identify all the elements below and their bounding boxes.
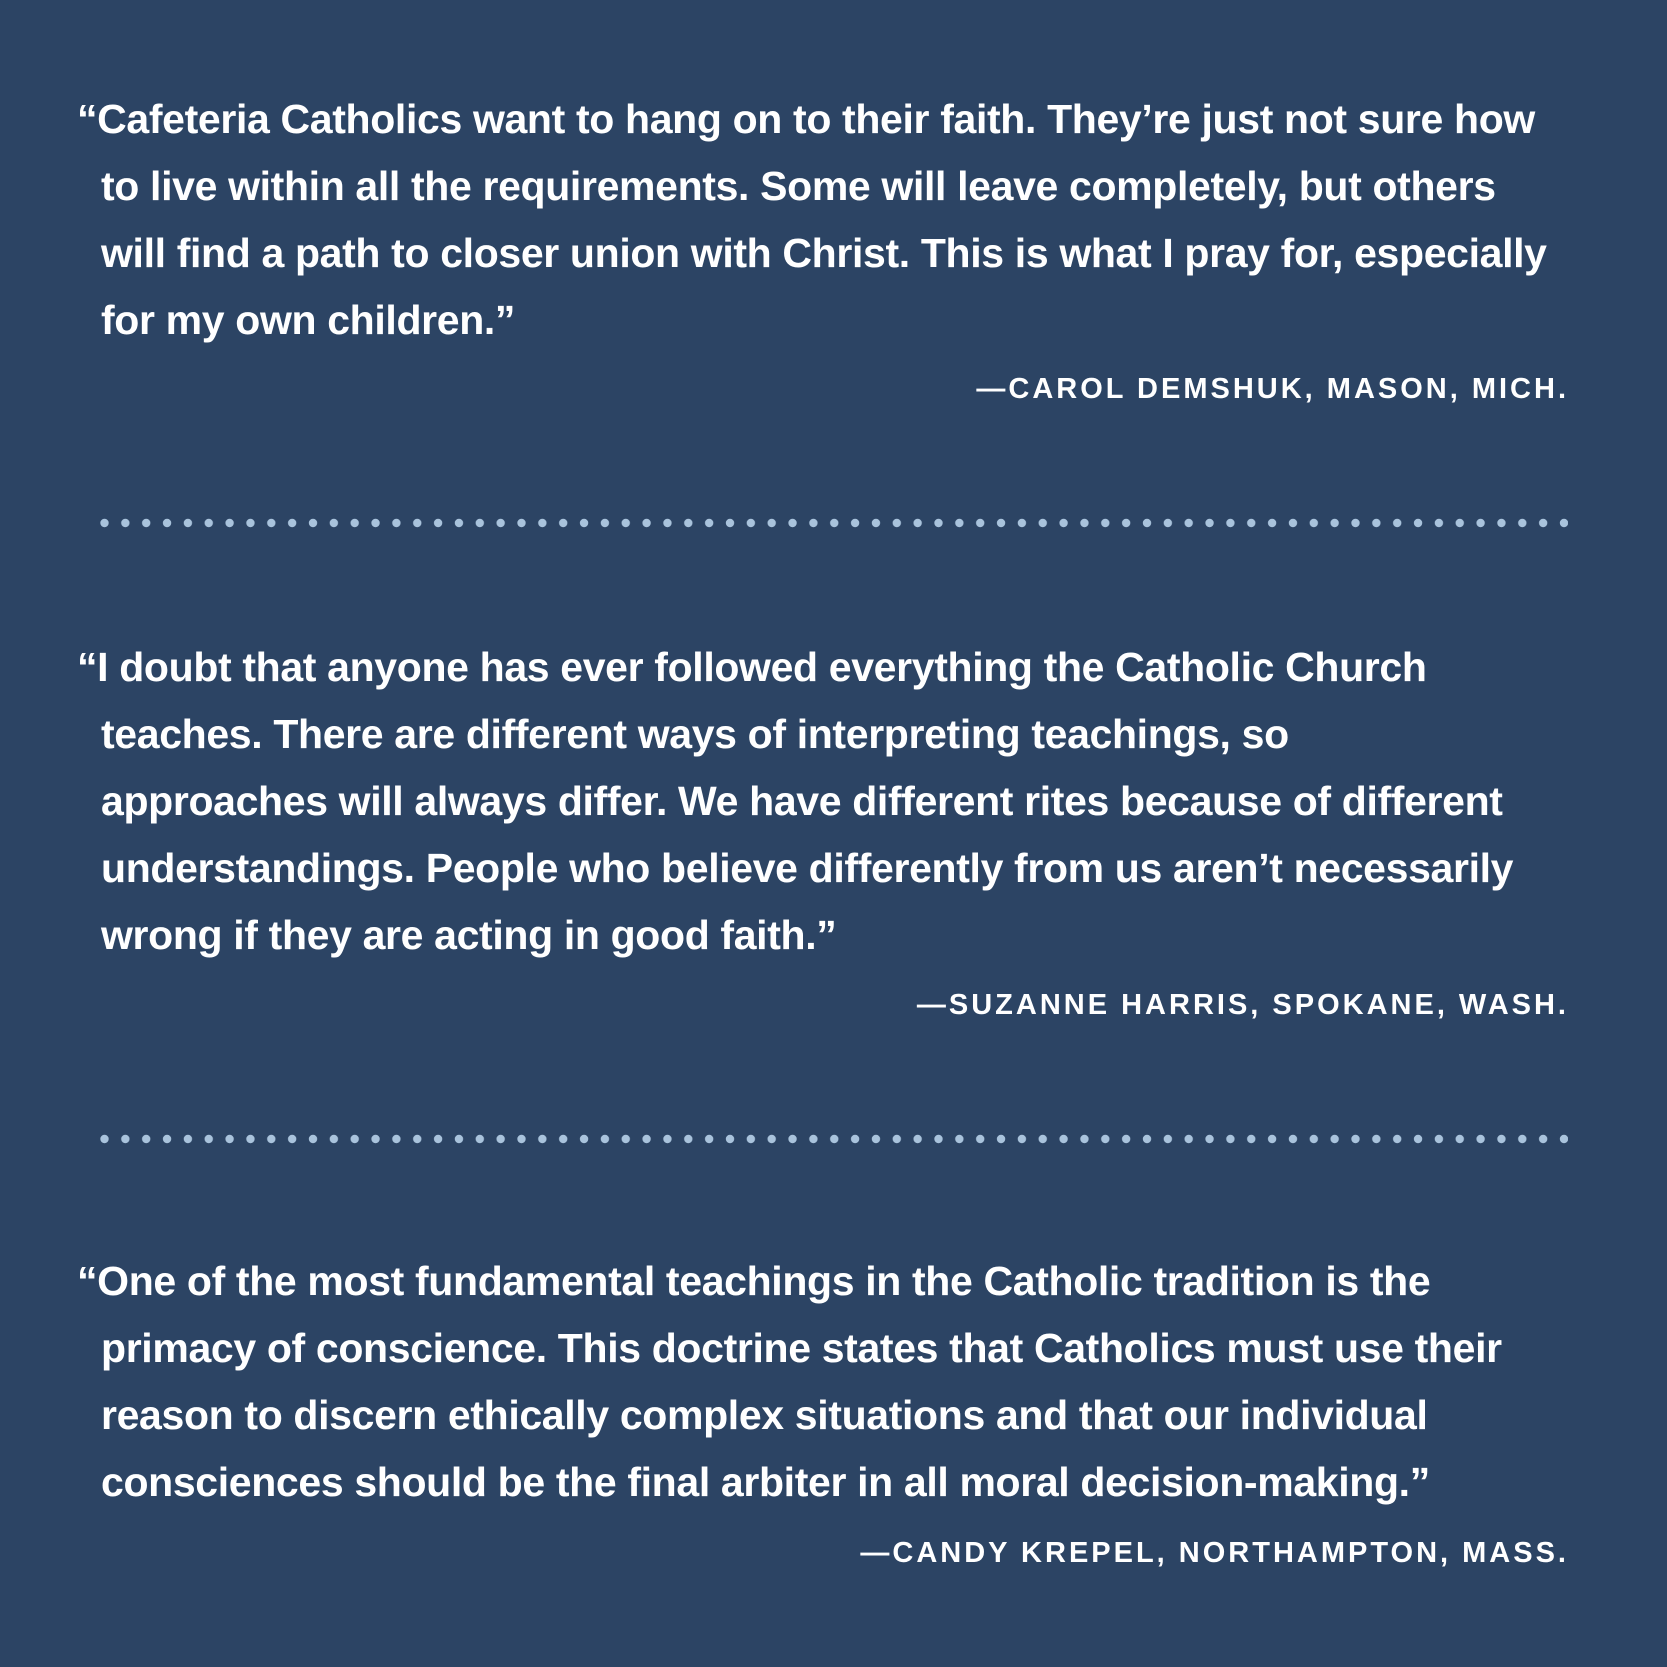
quote 1: will find a path to closer union with Christ. This is what I pray for, especially xyxy=(101,230,1547,276)
quote 1: to live within all the requirements. Some will leave completely, but others xyxy=(101,163,1496,209)
quote 2: teaches. There are different ways of interpreting teachings, so xyxy=(101,711,1289,757)
attribution 2: —SUZANNE HARRIS, SPOKANE, WASH. xyxy=(917,989,1569,1021)
quote 2: wrong if they are acting in good faith.” xyxy=(101,912,836,958)
quote 2 xyxy=(77,644,1514,958)
quote 1 xyxy=(77,96,1547,343)
quote 3: “One of the most fundamental teachings in the Catholic tradition is the xyxy=(77,1258,1430,1304)
quote 1: “Cafeteria Catholics want to hang on to their faith. They’re just not sure how xyxy=(77,96,1535,142)
quote 2: understandings. People who believe differently from us aren’t necessarily xyxy=(101,845,1513,891)
divider dots 2 xyxy=(100,1134,1568,1144)
quote 3: reason to discern ethically complex situations and that our individual xyxy=(101,1392,1428,1438)
attribution 3: —CANDY KREPEL, NORTHAMPTON, MASS. xyxy=(860,1537,1569,1569)
attribution 1: —CAROL DEMSHUK, MASON, MICH. xyxy=(976,373,1569,405)
quote 3: primacy of conscience. This doctrine states that Catholics must use their xyxy=(101,1325,1502,1371)
quote 3 xyxy=(77,1258,1502,1505)
quote 2: “I doubt that anyone has ever followed everything the Catholic Church xyxy=(77,644,1427,690)
quote 3: consciences should be the final arbiter in all moral decision-making.” xyxy=(101,1459,1430,1505)
quote 1: for my own children.” xyxy=(101,297,515,343)
quote 2: approaches will always differ. We have different rites because of different xyxy=(101,778,1503,824)
divider dots 1 xyxy=(100,518,1568,528)
